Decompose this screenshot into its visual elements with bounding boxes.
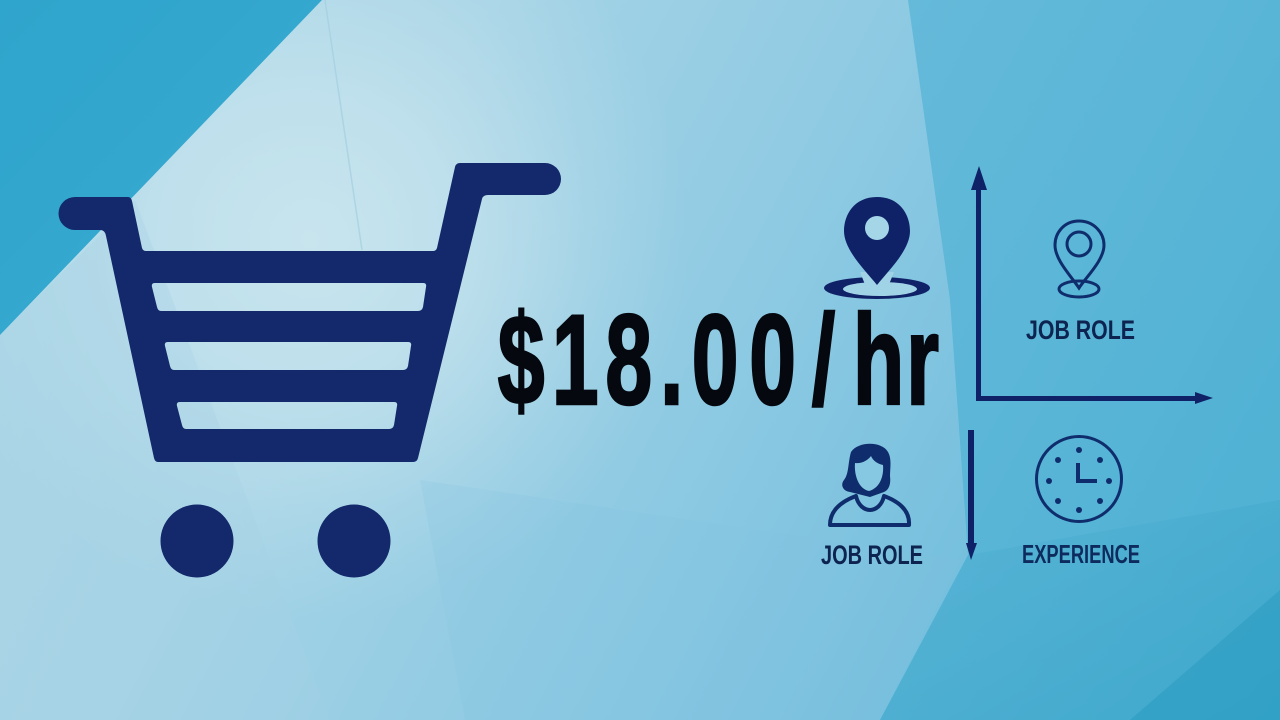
icon: clock (1036, 436, 1122, 522)
label: job role upper: JOB ROLE (1026, 315, 1135, 345)
price text: $18.00/hr (498, 288, 939, 431)
icon: person (830, 444, 909, 525)
label: experience: EXPERIENCE (1022, 539, 1140, 569)
icon: filled location pin (824, 197, 930, 299)
label: job role lower: JOB ROLE (821, 540, 923, 570)
arrow: down (966, 430, 977, 560)
icon: shopping cart (58, 163, 561, 578)
icon: outline location pin (1055, 221, 1104, 297)
axis arrows: up and right (971, 166, 1213, 404)
